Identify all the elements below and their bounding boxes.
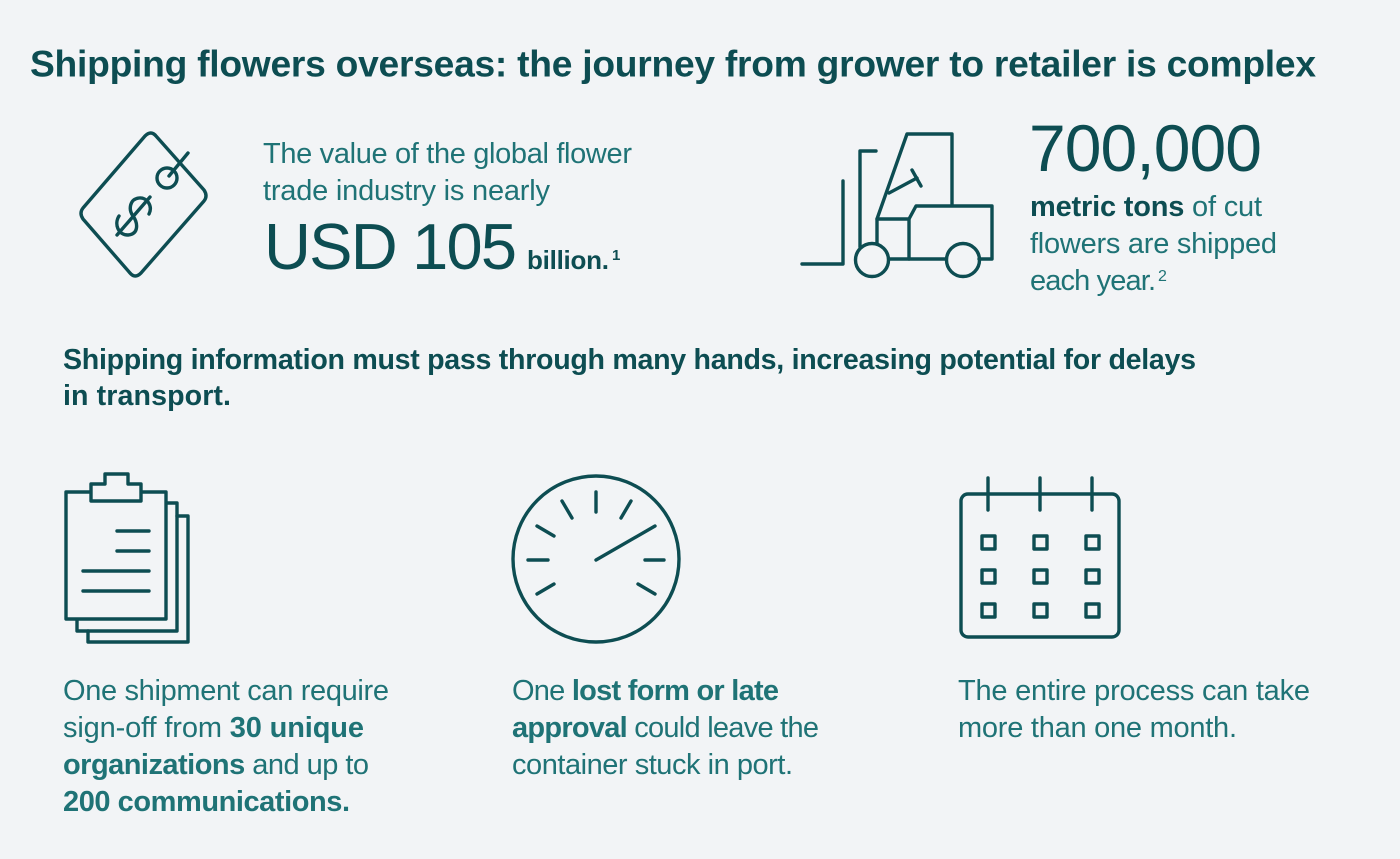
- panel: sign-off: [63, 474, 389, 818]
- stat: USD 105 billion: billion.: [527, 245, 609, 275]
- icon: price tag: [81, 133, 206, 276]
- text: sign-off description: [63, 675, 389, 818]
- text: lost form description: container stuck in port.: [512, 749, 793, 781]
- text: sign-off description: One shipment can require: [63, 675, 389, 707]
- text: lost form description: [512, 675, 819, 781]
- text: metric tons description: flowers are shipped: [1030, 228, 1277, 260]
- subheading: [63, 344, 1196, 412]
- title: Shipping flowers overseas: the journey from grower to retailer is complex: [30, 42, 1316, 84]
- text: sign-off description: sign-off from 30 unique: [63, 712, 364, 744]
- text: duration description: [958, 675, 1310, 744]
- stat: USD 105 billion: USD 105: [264, 210, 517, 283]
- text: duration description: The entire process can take: [958, 675, 1310, 707]
- text: metric tons description: each year.: [1030, 265, 1156, 297]
- panel: flower trade value: [81, 133, 632, 283]
- text: sign-off description: organizations and up to: [63, 749, 369, 781]
- text: metric tons description: 2: [1158, 268, 1167, 285]
- subheading: Shipping information must pass through many hands, increasing potential for delays: [63, 344, 1196, 376]
- panel: metric tons shipped: [802, 111, 1277, 297]
- panel: duration: [958, 478, 1310, 744]
- subheading: in transport.: [63, 380, 231, 412]
- stat: 700,000: 700,000: [1029, 111, 1262, 185]
- stat: USD 105 billion: 1: [612, 247, 620, 264]
- text: duration description: more than one month.: [958, 712, 1237, 744]
- icon: gauge: [513, 476, 679, 642]
- icon: forklift: [802, 134, 992, 276]
- text: lost form description: One lost form or late: [512, 675, 779, 707]
- panel: lost form: [512, 476, 819, 781]
- text: metric tons description: [1030, 191, 1277, 297]
- text: flower trade intro: [263, 138, 632, 207]
- text: sign-off description: 200 communications.: [63, 786, 350, 818]
- text: lost form description: approval could leave the: [512, 712, 819, 744]
- icon: clipboard with stacked pages: [66, 474, 188, 642]
- text: metric tons description: metric tons of cut: [1030, 191, 1262, 223]
- icon: calendar: [961, 478, 1119, 637]
- text: flower trade intro: trade industry is nearly: [263, 175, 550, 207]
- text: flower trade intro: The value of the global flower: [263, 138, 632, 170]
